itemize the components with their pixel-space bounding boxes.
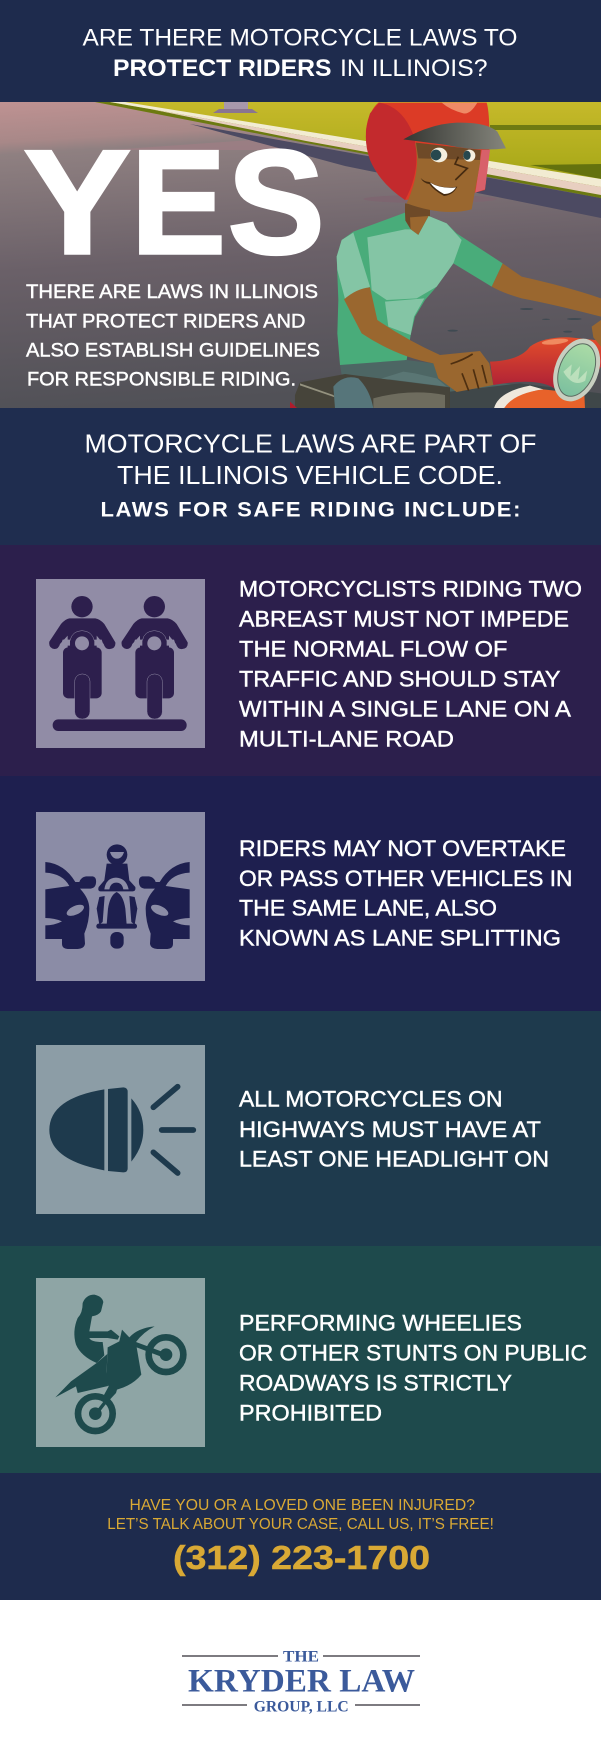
text: headlight: HIGHWAYS MUST HAVE AT	[239, 1117, 541, 1142]
header band	[0, 0, 601, 102]
text: riding two abreast: WITHIN A SINGLE LANE ON A	[239, 697, 571, 722]
panel: headlight	[0, 1011, 601, 1246]
icon: wheelie	[36, 1278, 205, 1447]
YES: S	[228, 120, 325, 286]
title: ARE THERE MOTORCYCLE LAWS TO	[82, 25, 518, 52]
text: riding two abreast: ABREAST MUST NOT IMPEDE	[239, 607, 569, 632]
text: riding two abreast: MULTI-LANE ROAD	[239, 727, 454, 752]
road shadow	[190, 124, 601, 218]
text: wheelies: PERFORMING WHEELIES	[239, 1311, 522, 1336]
left car	[45, 862, 96, 949]
text: lane splitting: OR PASS OTHER VEHICLES IN	[239, 866, 572, 891]
panel: riding two abreast	[0, 545, 601, 776]
grass verge	[95, 102, 601, 198]
banner text: THAT PROTECT RIDERS AND	[26, 310, 306, 332]
right arm	[492, 263, 601, 317]
text: wheelies: PROHIBITED	[239, 1401, 382, 1426]
text: wheelies: ROADWAYS IS STRICTLY	[239, 1371, 512, 1396]
pink road highlight	[118, 138, 288, 150]
phone number: (312) 223-1700	[173, 1539, 430, 1576]
banner text: THERE ARE LAWS IN ILLINOIS	[26, 281, 318, 303]
neck	[405, 203, 430, 235]
text: riding two abreast: THE NORMAL FLOW OF	[239, 637, 508, 662]
center rider	[96, 844, 137, 949]
text: riding two abreast: TRAFFIC AND SHOULD STAY	[239, 667, 561, 692]
headlight	[553, 338, 600, 402]
pants and knee	[340, 360, 511, 392]
left arm and hand	[344, 287, 601, 392]
text: lane splitting: KNOWN AS LANE SPLITTING	[239, 926, 561, 951]
visor	[403, 123, 506, 149]
panel: wheelies	[0, 1246, 601, 1473]
bike lower	[450, 383, 601, 408]
YES	[24, 148, 320, 256]
call to action text: LET’S TALK ABOUT YOUR CASE, CALL US, IT’S FREE!	[107, 1516, 494, 1533]
logo	[182, 1649, 420, 1716]
panel: vehicle code intro	[0, 408, 601, 545]
road marks	[447, 308, 582, 333]
text: lane splitting	[239, 836, 572, 951]
panel: logo footer	[0, 1600, 601, 1757]
panel: road illustration banner	[0, 102, 601, 408]
text: headlight	[239, 1087, 549, 1172]
intro heading	[84, 428, 536, 490]
YES: Y	[24, 120, 131, 285]
banner text	[26, 281, 320, 390]
text: headlight: LEAST ONE HEADLIGHT ON	[239, 1147, 549, 1172]
text: headlight: ALL MOTORCYCLES ON	[239, 1087, 502, 1112]
title: IN ILLINOIS?	[340, 55, 488, 82]
icon: two motorcycles abreast	[36, 579, 205, 748]
text: lane splitting: THE SAME LANE, ALSO	[239, 896, 497, 921]
text: lane splitting: RIDERS MAY NOT OVERTAKE	[239, 836, 566, 861]
intro heading: THE ILLINOIS VEHICLE CODE.	[117, 460, 503, 490]
panel: call to action	[0, 1473, 601, 1600]
logo: GROUP, LLC	[254, 1699, 349, 1716]
seat	[290, 374, 450, 408]
banner text: ALSO ESTABLISH GUIDELINES	[26, 340, 320, 362]
text: wheelies	[239, 1311, 587, 1426]
road background	[0, 102, 601, 408]
helmet	[366, 103, 490, 200]
shirt	[337, 213, 503, 369]
intro subheading: LAWS FOR SAFE RIDING INCLUDE:	[100, 499, 522, 522]
bike body	[490, 337, 601, 393]
rider illustration	[290, 103, 601, 408]
text: riding two abreast: MOTORCYCLISTS RIDING TWO	[239, 577, 582, 602]
title	[82, 25, 518, 82]
call to action text	[107, 1497, 494, 1533]
right car	[139, 862, 190, 949]
banner text: FOR RESPONSIBLE RIDING.	[27, 368, 296, 390]
panel: lane splitting	[0, 776, 601, 1011]
intro heading: MOTORCYCLE LAWS ARE PART OF	[84, 428, 536, 458]
face	[407, 143, 481, 212]
road edge line	[110, 102, 601, 195]
text: riding two abreast	[239, 577, 582, 752]
fender	[494, 386, 585, 408]
text: wheelies: OR OTHER STUNTS ON PUBLIC	[239, 1341, 587, 1366]
call to action text: HAVE YOU OR A LOVED ONE BEEN INJURED?	[130, 1497, 475, 1514]
head shadow	[366, 196, 398, 198]
logo: THE	[283, 1649, 319, 1666]
logo: KRYDER LAW	[188, 1664, 415, 1700]
title: PROTECT RIDERS	[113, 55, 332, 82]
YES: E	[131, 120, 226, 285]
roadside post	[213, 102, 258, 113]
icon: headlight	[36, 1045, 205, 1214]
icon: motorcycle between cars	[36, 812, 205, 981]
